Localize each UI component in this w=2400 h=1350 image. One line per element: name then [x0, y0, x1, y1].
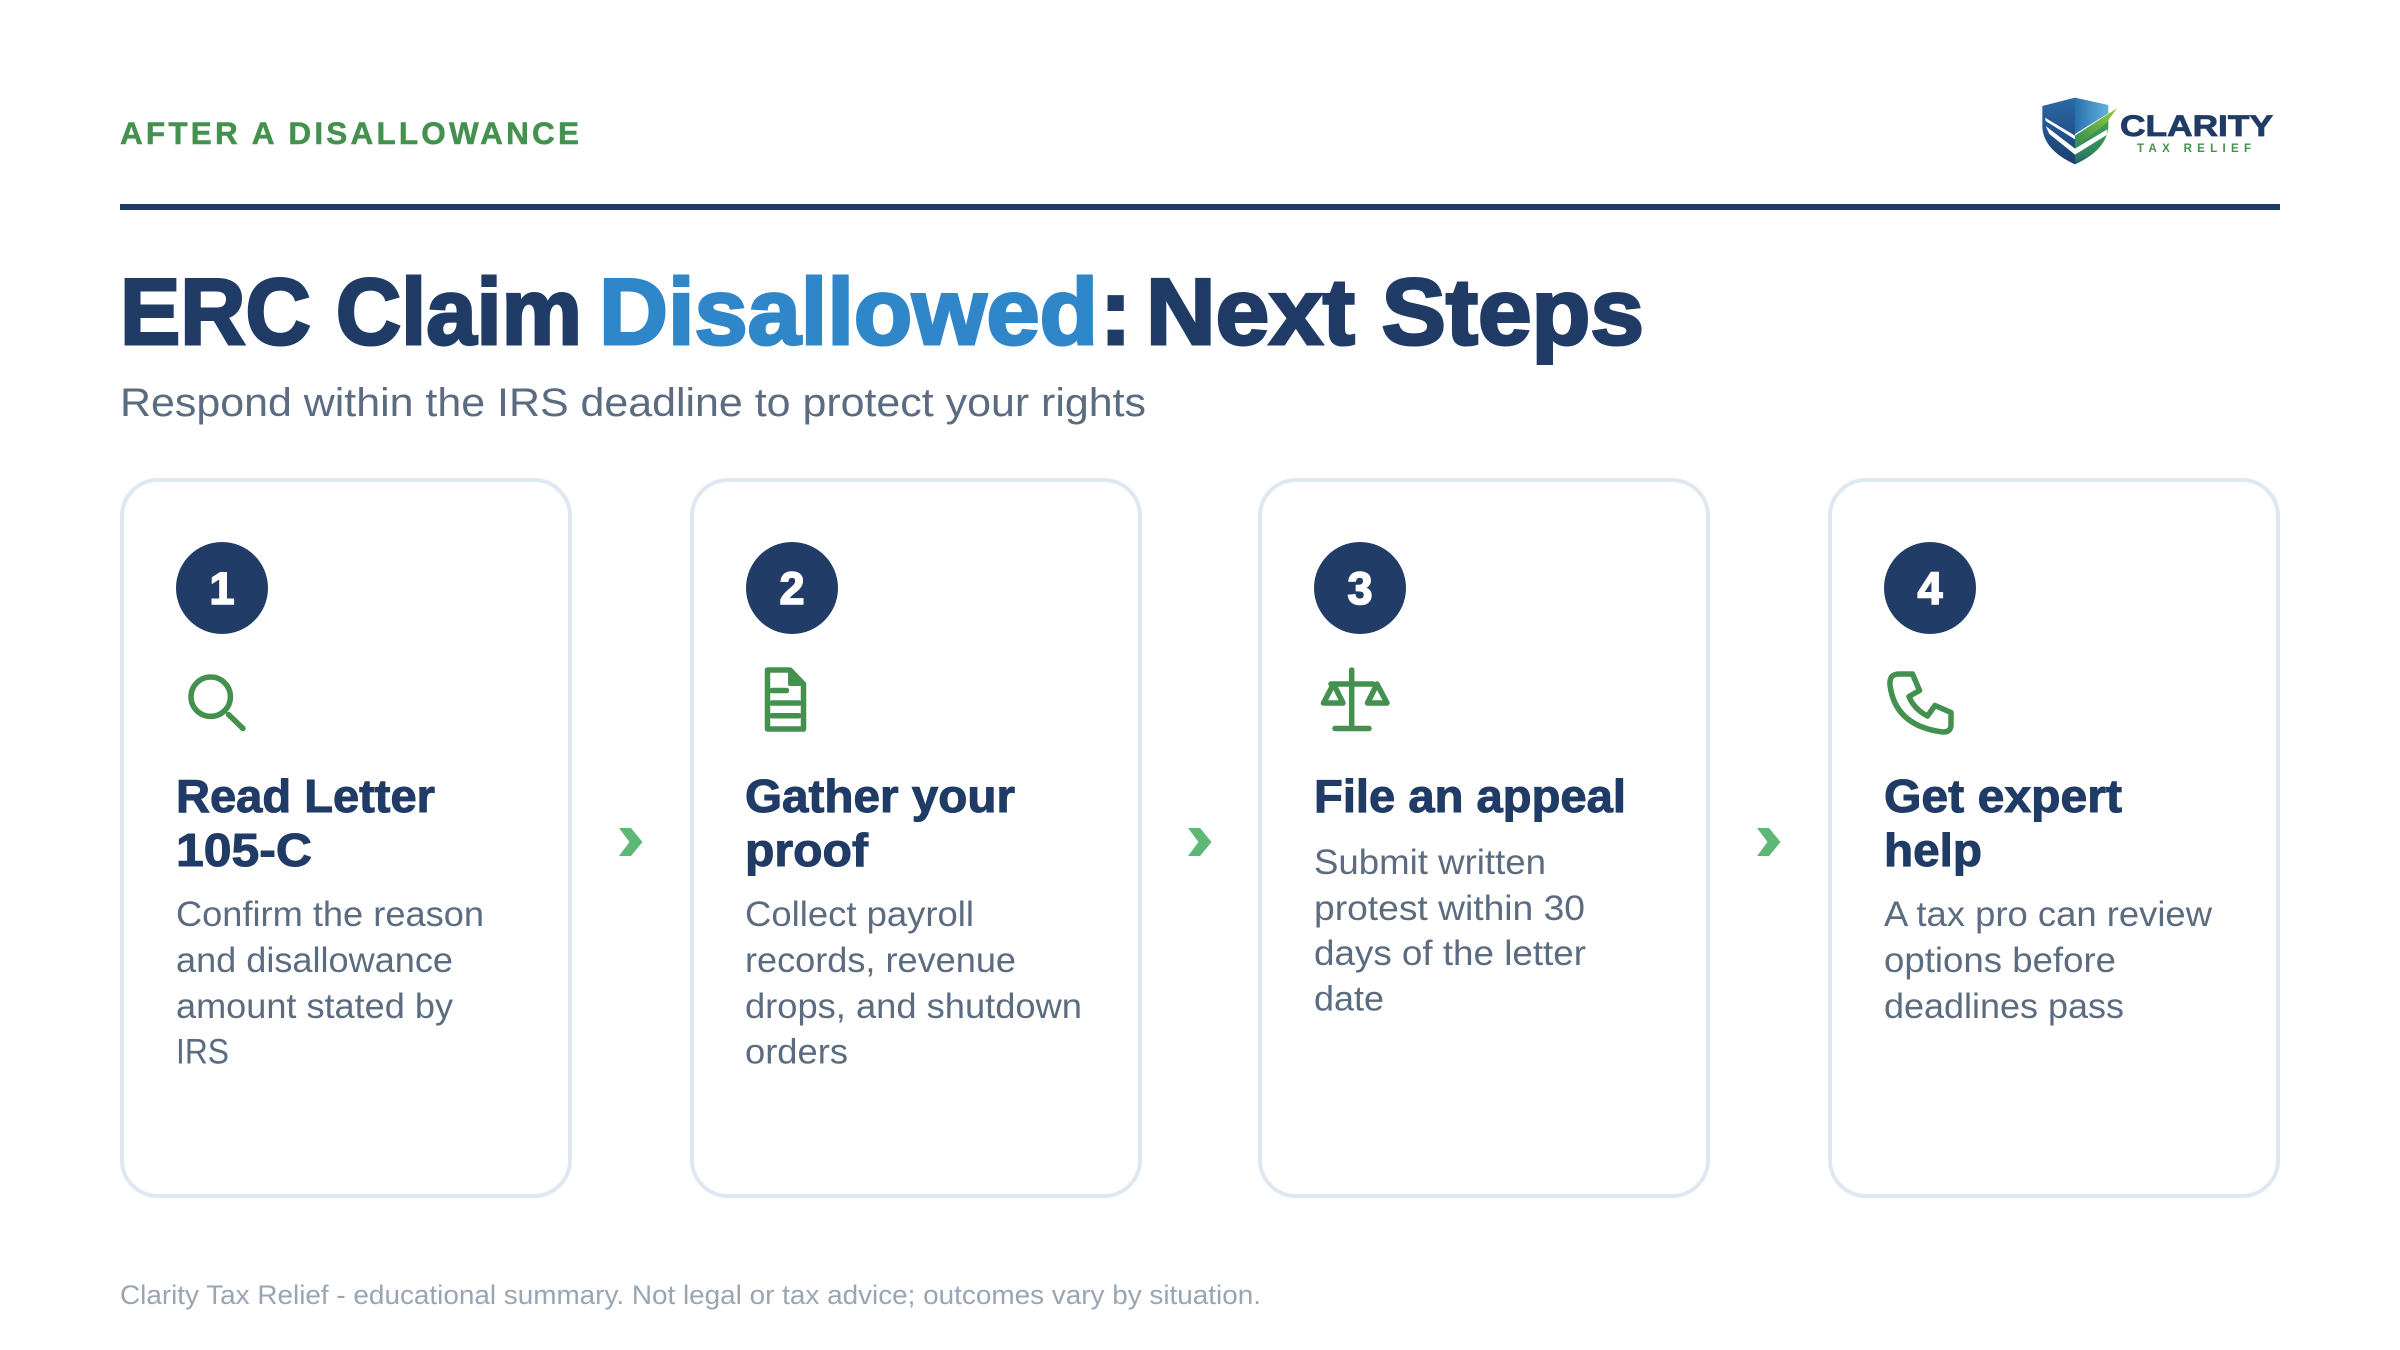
- step 3 heading: File an appeal: [1314, 770, 1626, 822]
- icon: shield with check: [2042, 98, 2117, 164]
- step 2 heading: Gather your: [745, 770, 1015, 822]
- subtitle: Respond within the IRS deadline to protect your rights: [120, 381, 1146, 425]
- title: :: [1100, 259, 1131, 364]
- step 2 description: orders: [745, 1032, 848, 1072]
- step 3 description: protest within 30: [1314, 889, 1585, 928]
- title: [120, 259, 1644, 364]
- step number 3: 3: [1347, 563, 1373, 614]
- title: Next Steps: [1146, 259, 1644, 364]
- step 4 heading: help: [1884, 824, 1982, 876]
- step number 4: [1884, 542, 1976, 634]
- step 1 description: IRS: [176, 1032, 229, 1072]
- title: ERC Claim: [120, 259, 582, 364]
- logo wordmark: CLARITY: [2120, 110, 2273, 143]
- eyebrow label: AFTER A DISALLOWANCE: [120, 115, 579, 151]
- step 4 description: A tax pro can review: [1884, 895, 2213, 934]
- arrow 2 to 3: [1188, 828, 1212, 856]
- logo tagline: TAX RELIEF: [2137, 143, 2251, 155]
- step 3 description: days of the letter: [1314, 934, 1586, 973]
- step 1 description: [176, 895, 484, 1072]
- step number 1: [176, 542, 268, 634]
- icon: document: [768, 670, 804, 729]
- icon: magnifying glass: [191, 677, 243, 728]
- step 2 description: [745, 895, 1082, 1072]
- step 3 description: date: [1314, 980, 1384, 1018]
- step 1 description: amount stated by: [176, 987, 454, 1026]
- step number 4: 4: [1917, 563, 1943, 614]
- step 1 heading: Read Letter: [176, 770, 435, 822]
- panel: step 3: [1260, 480, 1708, 1196]
- icon: balance scales: [1324, 670, 1387, 728]
- header rule: [120, 204, 2280, 210]
- step 2 description: Collect payroll: [745, 895, 974, 934]
- step number 1: 1: [209, 563, 235, 614]
- step 4 description: [1884, 895, 2213, 1026]
- step 2 heading: [745, 770, 1015, 876]
- icon: telephone: [1890, 674, 1951, 732]
- step 2 description: records, revenue: [745, 941, 1016, 980]
- arrow 1 to 2: [619, 828, 642, 856]
- title: Disallowed: [599, 259, 1098, 364]
- panel: step 2: [692, 480, 1140, 1196]
- step 1 heading: 105-C: [176, 824, 312, 876]
- logo: Clarity Tax Relief: [2042, 98, 2273, 164]
- step 1 heading: [176, 770, 435, 876]
- arrow 3 to 4: [1757, 828, 1780, 856]
- step 4 description: deadlines pass: [1884, 987, 2124, 1026]
- step 4 heading: Get expert: [1884, 770, 2122, 822]
- step 1 description: and disallowance: [176, 941, 453, 980]
- step number 3: [1314, 542, 1406, 634]
- step 1 description: Confirm the reason: [176, 895, 484, 934]
- step number 2: 2: [779, 563, 805, 614]
- footer disclaimer: Clarity Tax Relief - educational summary. Not legal or tax advice; outcomes vary by situation.: [120, 1280, 1261, 1310]
- panel: step 1: [122, 480, 570, 1196]
- step 4 description: options before: [1884, 941, 2116, 980]
- step 2 description: drops, and shutdown: [745, 987, 1082, 1026]
- panel: step 4: [1830, 480, 2278, 1196]
- step 2 heading: proof: [745, 824, 869, 876]
- step number 2: [746, 542, 838, 634]
- step 3 description: [1314, 843, 1586, 1018]
- step 4 heading: [1884, 770, 2122, 876]
- step 3 description: Submit written: [1314, 843, 1546, 882]
